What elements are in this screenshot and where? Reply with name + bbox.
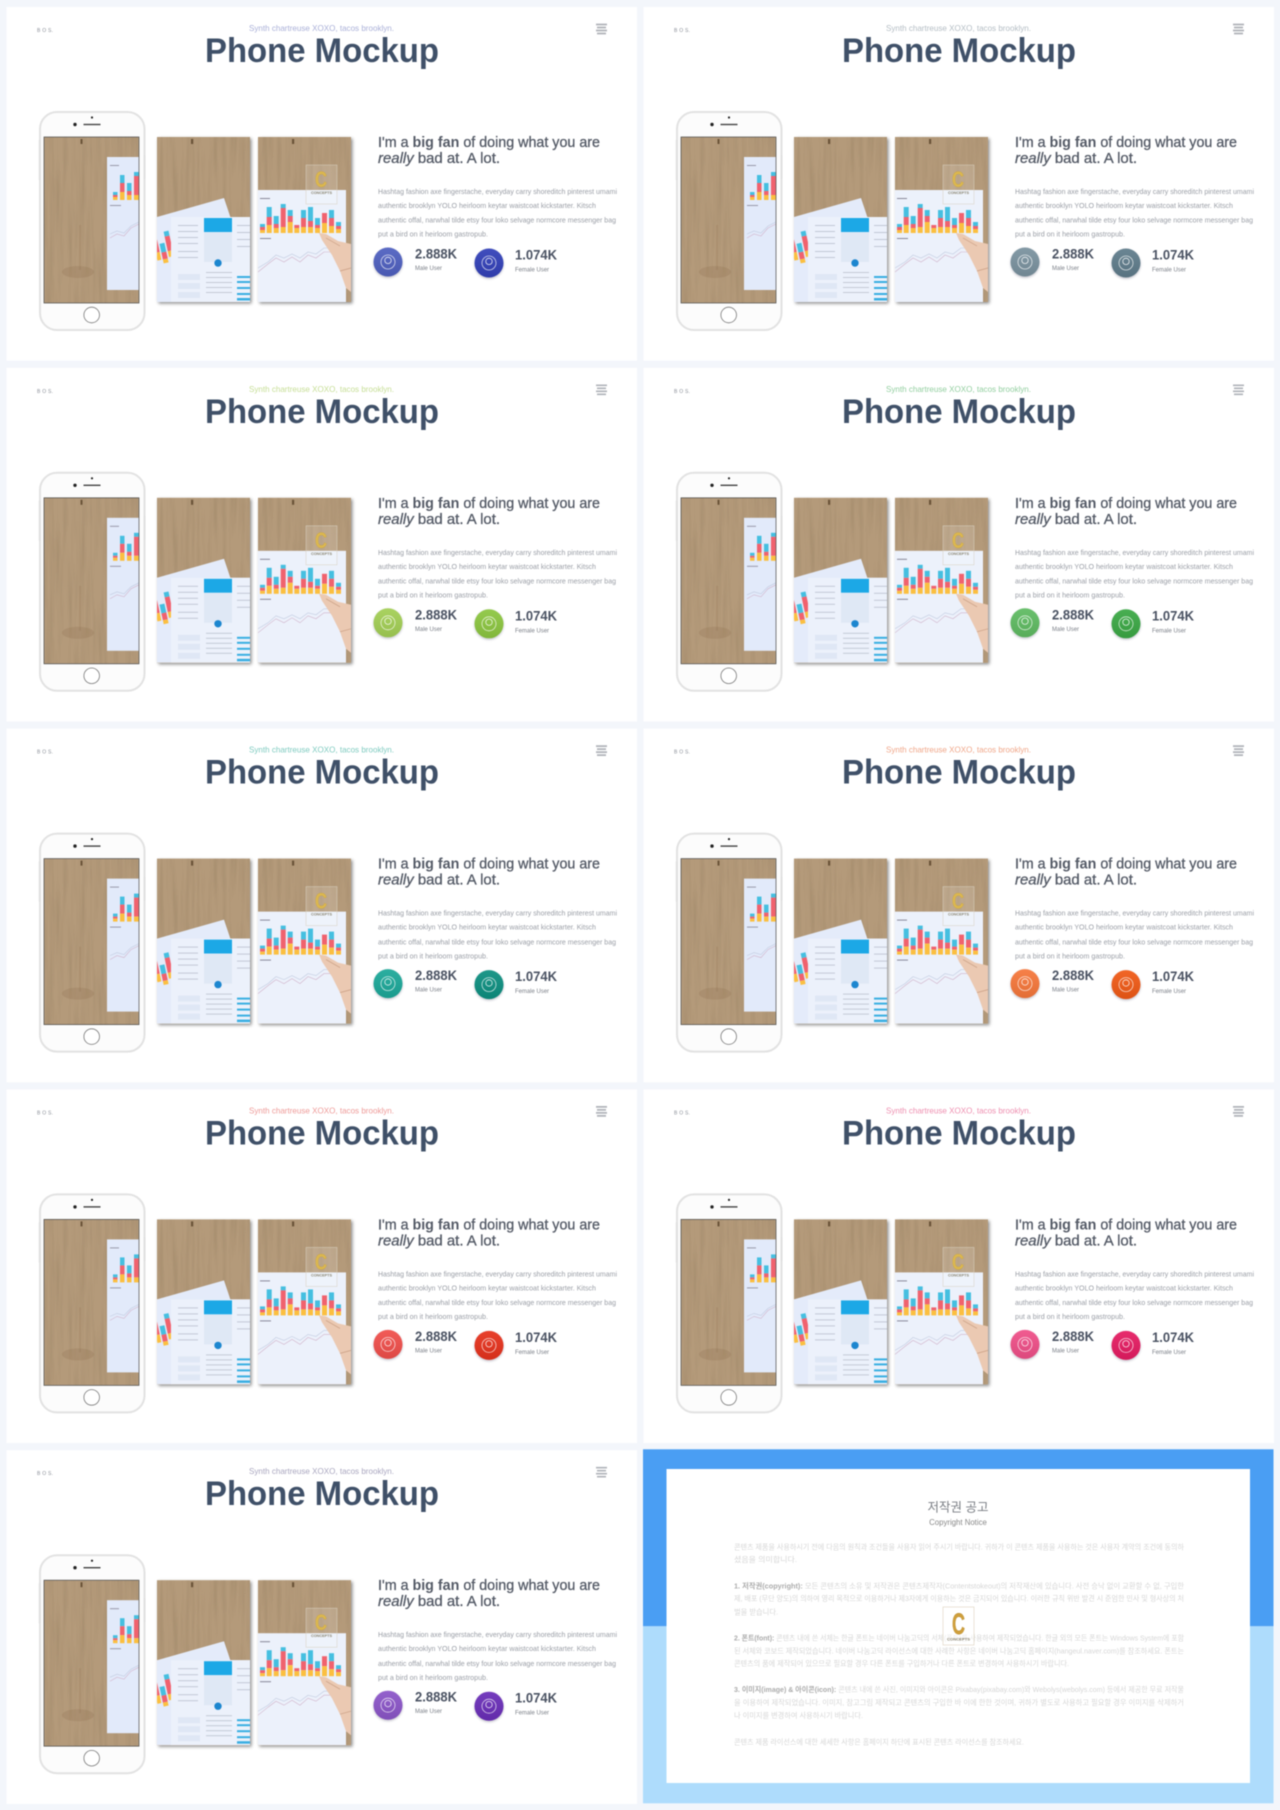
paragraph: authentic offal, narwhal tilde etsy four loko selvage normcore messenger bag [378,216,616,225]
panel: slide 8 pink [644,1089,1274,1443]
stat: female user: 1.074K [515,248,557,262]
paragraph [1015,548,1254,600]
photo card: chart and hand [258,137,351,302]
paragraph: Hashtag fashion axe fingerstache, everyday carry shoreditch pinterest umami [378,1630,617,1639]
paragraph: authentic offal, narwhal tilde etsy four loko selvage normcore messenger bag [1015,216,1253,225]
headline: I'm a big fan of doing what you are [1015,1217,1237,1233]
brand mark: B O S. [674,1110,690,1116]
logo on photo: C [952,528,964,553]
stat: female user: 1.074K [1152,248,1194,262]
logo: concepts: CONCEPTS [947,1638,971,1642]
panel: slide 3 lime [6,368,637,722]
icon: male user [1010,1330,1040,1359]
stat: female user: Female User [1152,989,1186,995]
stat: male user: Male User [415,1709,442,1715]
paragraph: put a bird on it heirloom gastropub. [1015,951,1125,960]
icon: menu [596,1107,607,1116]
photo card: documents [789,137,887,302]
subtitle: Synth chartreuse XOXO, tacos brooklyn. [886,745,1031,755]
stat: male user [415,1690,457,1715]
stat: male user: 2.888K [1052,968,1094,983]
paragraph: put a bird on it heirloom gastropub. [1015,230,1125,239]
section 3 image and icon: 을 이용하여 제작되었습니다. 이미지, 참고그림 제작되고 콘텐츠의 구입한 바 이에 한한 것이며, 귀하가 별도로 사용하고 필요할 경우 이미지를 삭제하거 [734,1698,1184,1707]
paragraph [378,1630,617,1682]
paragraph [1015,909,1254,960]
photo card: chart and hand [895,498,988,663]
photo card: documents [152,859,250,1024]
title: Phone Mockup [842,393,1076,431]
paragraph: Hashtag fashion axe fingerstache, everyday carry shoreditch pinterest umami [378,187,617,196]
stat: male user: Male User [1052,627,1079,633]
phone mockup [676,1194,782,1412]
stat: male user [1052,1329,1094,1354]
stat: male user: Male User [415,1348,442,1354]
icon: male user [1010,248,1040,276]
intro text: 셨음을 의미합니다. [734,1555,797,1564]
stat: male user: Male User [415,627,442,633]
stat: male user: Male User [1052,1348,1079,1354]
photo card: documents [152,498,250,663]
section 1 copyright: 1. 저작권(copyright): 모든 콘텐츠의 소유 및 저작권은 콘텐츠제작자(Contentstokeout)의 저작재산에 있습니다. 사전 승낙 없이 교환할 수 없, 구입한 [734,1582,1184,1590]
headline: I'm a big fan of doing what you are [1015,857,1237,873]
section 3 image and icon [734,1685,1184,1720]
brand mark: B O S. [37,28,53,34]
stat: female user: 1.074K [515,1691,557,1706]
copyright heading: Copyright Notice [929,1518,987,1527]
icon: menu [596,1468,607,1477]
headline [378,496,600,528]
phone mockup [39,1555,145,1773]
panel: slide 6 orange [644,729,1274,1082]
subtitle: Synth chartreuse XOXO, tacos brooklyn. [886,23,1031,33]
section 1 copyright: 제, 배포 (무단 양도)의 의하여 영리 목적으로 이용하거나 제3자에게 이용하는 것은 금지되어 있습니다. 이러한 규칙 위반 발견 시 준엄한 민사 및 형사상의 처 [734,1594,1184,1603]
phone mockup [39,1194,145,1412]
headline [378,1217,600,1249]
headline: I'm a big fan of doing what you are [378,496,600,512]
logo on photo [311,528,333,556]
photo card: documents [789,1219,887,1384]
stat: male user [415,246,457,272]
stat: female user: 1.074K [515,1330,557,1345]
icon: menu [1233,746,1244,755]
panel: slide 5 teal [6,729,637,1082]
paragraph: authentic brooklyn YOLO heirloom keytar waistcoat kickstarter. Kitsch [1015,923,1233,932]
logo: concepts [943,1607,974,1645]
paragraph: authentic brooklyn YOLO heirloom keytar waistcoat kickstarter. Kitsch [1015,1283,1233,1292]
stat: male user: 2.888K [415,968,457,983]
stat: male user [1052,968,1094,994]
headline: really bad at. A lot. [1015,151,1137,167]
panel: slide 1 indigo [6,7,637,361]
logo on photo: C [952,889,964,914]
phone mockup [676,834,782,1052]
panel: slide 2 slate [644,7,1274,361]
paragraph: Hashtag fashion axe fingerstache, everyday carry shoreditch pinterest umami [1015,548,1254,557]
phone mockup [676,112,782,330]
stat: male user [1052,607,1094,633]
headline: I'm a big fan of doing what you are [378,1578,600,1594]
logo on photo: CONCEPTS [311,1634,333,1638]
stat: male user: 2.888K [1052,246,1094,262]
paragraph: authentic offal, narwhal tilde etsy four loko selvage normcore messenger bag [378,1298,616,1307]
photo card: documents [789,859,887,1024]
stat: female user: Female User [515,1350,549,1356]
subtitle: Synth chartreuse XOXO, tacos brooklyn. [886,384,1031,394]
stat: female user: 1.074K [1152,1330,1194,1345]
headline: I'm a big fan of doing what you are [378,135,600,151]
title: Phone Mockup [842,1114,1076,1152]
icon: female user [1112,970,1140,999]
paragraph: authentic offal, narwhal tilde etsy four loko selvage normcore messenger bag [378,1659,616,1668]
stat: female user [1152,1330,1194,1356]
stat: female user: Female User [515,1711,549,1717]
paragraph: authentic offal, narwhal tilde etsy four loko selvage normcore messenger bag [1015,576,1253,585]
paragraph: Hashtag fashion axe fingerstache, everyday carry shoreditch pinterest umami [378,548,617,557]
photo card: documents [152,137,250,302]
stat: female user [515,1330,557,1356]
section 2 font: 2. 폰트(font): 콘텐츠 내에 쓴 서체는 한글 폰트는 네이버 나눔고딕의 서체(폰트)를 사용하여 제작되었습니다. 한글 외의 모든 폰트는 Windows System에 포함 [734,1634,1184,1642]
title: Phone Mockup [842,754,1076,792]
paragraph: put a bird on it heirloom gastropub. [1015,1312,1125,1321]
logo on photo: CONCEPTS [311,191,333,195]
paragraph: authentic brooklyn YOLO heirloom keytar waistcoat kickstarter. Kitsch [1015,562,1233,571]
paragraph: authentic offal, narwhal tilde etsy four loko selvage normcore messenger bag [1015,1298,1253,1307]
photo card: chart and hand [258,1219,351,1384]
copyright heading [928,1500,988,1527]
stat: male user: Male User [415,988,442,994]
phone mockup [39,112,145,330]
stat: male user: 2.888K [415,246,457,262]
headline [378,135,600,167]
logo on photo: C [315,528,327,553]
stat: male user: 2.888K [415,1690,457,1705]
icon: female user [1112,1331,1140,1360]
icon: menu [596,385,607,394]
photo card: chart and hand [895,859,988,1024]
logo on photo: CONCEPTS [311,1273,333,1277]
panel: copyright notice [643,1449,1274,1803]
headline [378,857,600,889]
logo on photo: C [315,167,327,192]
logo: concepts: C [952,1608,965,1641]
brand mark: B O S. [674,389,690,395]
photo card: documents [152,1580,250,1745]
paragraph [1015,1269,1254,1321]
paragraph: authentic offal, narwhal tilde etsy four loko selvage normcore messenger bag [1015,937,1253,946]
paragraph: Hashtag fashion axe fingerstache, everyday carry shoreditch pinterest umami [378,1269,617,1278]
title: Phone Mockup [205,32,439,70]
phone mockup [39,473,145,691]
paragraph [378,548,617,600]
paragraph: Hashtag fashion axe fingerstache, everyday carry shoreditch pinterest umami [1015,187,1254,196]
headline [1015,135,1237,167]
logo on photo: CONCEPTS [311,913,333,917]
stat: female user: Female User [515,628,549,634]
icon: male user [1010,608,1040,637]
stat: female user [1152,608,1194,634]
icon: male user [374,248,402,276]
logo on photo: C [952,167,964,192]
panel: slide 7 red [6,1089,637,1443]
stat: female user [515,248,557,274]
photo card: documents [152,1219,250,1384]
icon: female user [474,609,504,638]
section 2 font: 콘텐츠의 품에 제작되어 있으므로 필요할 경우 다른 폰트를 구입하거나 다른 폰트로 변경하여 사용하시기 바랍니다. [734,1659,1069,1668]
headline: really bad at. A lot. [1015,1233,1137,1249]
paragraph [378,909,617,960]
logo on photo [948,528,970,556]
headline [1015,496,1237,528]
photo card: chart and hand [258,1580,351,1745]
stat: female user: Female User [515,989,549,995]
logo on photo [948,167,970,195]
icon: female user [1112,609,1140,638]
copyright heading: 저작권 공고 [928,1500,988,1514]
brand mark: B O S. [37,1471,53,1477]
paragraph: put a bird on it heirloom gastropub. [378,1312,488,1321]
stat: male user: 2.888K [415,1329,457,1344]
title: Phone Mockup [842,32,1076,70]
icon: menu [1233,1107,1244,1116]
photo card: documents [789,498,887,663]
paragraph: authentic brooklyn YOLO heirloom keytar waistcoat kickstarter. Kitsch [378,562,596,571]
stat: male user [1052,246,1094,272]
stat: female user: Female User [1152,628,1186,634]
paragraph: put a bird on it heirloom gastropub. [378,1673,488,1682]
section 2 font [734,1634,1184,1668]
logo on photo: CONCEPTS [948,1273,970,1277]
logo on photo: C [315,1610,327,1635]
stat: male user: 2.888K [1052,1329,1094,1344]
brand mark: B O S. [37,750,53,756]
phone mockup [39,834,145,1052]
paragraph: Hashtag fashion axe fingerstache, everyday carry shoreditch pinterest umami [378,909,617,918]
title: Phone Mockup [205,1114,439,1152]
stat: female user: 1.074K [1152,969,1194,984]
paragraph: Hashtag fashion axe fingerstache, everyday carry shoreditch pinterest umami [1015,909,1254,918]
subtitle: Synth chartreuse XOXO, tacos brooklyn. [249,384,394,394]
paragraph [1015,187,1254,239]
paragraph: put a bird on it heirloom gastropub. [378,951,488,960]
paragraph: Hashtag fashion axe fingerstache, everyday carry shoreditch pinterest umami [1015,1269,1254,1278]
paragraph: authentic brooklyn YOLO heirloom keytar waistcoat kickstarter. Kitsch [378,1283,596,1292]
paragraph: put a bird on it heirloom gastropub. [1015,590,1125,599]
section 1 copyright: 벌을 받습니다. [734,1608,778,1616]
photo card: chart and hand [258,859,351,1024]
subtitle: Synth chartreuse XOXO, tacos brooklyn. [249,1466,394,1476]
subtitle: Synth chartreuse XOXO, tacos brooklyn. [249,745,394,755]
title: Phone Mockup [205,754,439,792]
paragraph: authentic brooklyn YOLO heirloom keytar waistcoat kickstarter. Kitsch [378,201,596,210]
logo on photo [311,1249,333,1277]
stat: male user: 2.888K [1052,607,1094,622]
headline: really bad at. A lot. [378,512,500,528]
logo on photo [948,889,970,917]
phone mockup [676,473,782,691]
stat: female user [1152,969,1194,995]
headline [1015,1217,1237,1249]
paragraph: authentic brooklyn YOLO heirloom keytar waistcoat kickstarter. Kitsch [378,923,596,932]
paragraph: put a bird on it heirloom gastropub. [378,590,488,599]
stat: male user [415,1329,457,1354]
panel: slide 4 green [644,368,1274,722]
stat: female user [515,1691,557,1717]
logo on photo [311,1610,333,1638]
paragraph: authentic offal, narwhal tilde etsy four loko selvage normcore messenger bag [378,937,616,946]
stat: male user: Male User [1052,266,1079,272]
icon: female user [474,248,504,278]
title: Phone Mockup [205,1475,439,1513]
stat: female user [515,608,557,634]
logo on photo: CONCEPTS [948,913,970,917]
logo on photo [311,889,333,917]
stat: female user: 1.074K [1152,608,1194,623]
photo card: chart and hand [895,137,988,302]
section 1 copyright [734,1582,1184,1616]
icon: female user [474,970,504,999]
headline: I'm a big fan of doing what you are [378,857,600,873]
stat: male user: Male User [1052,988,1079,994]
intro text [734,1542,1184,1564]
stat: male user [415,607,457,633]
icon: menu [596,24,607,34]
stat: female user: 1.074K [515,608,557,623]
headline: really bad at. A lot. [378,1233,500,1249]
subtitle: Synth chartreuse XOXO, tacos brooklyn. [886,1105,1031,1115]
icon: male user [374,1691,402,1720]
intro text: 콘텐츠 제품을 사용하시기 전에 다음의 원칙과 조건들을 사용자 읽어 주시기 바랍니다. 귀하가 이 콘텐츠 제품을 사용하는 것은 사용자 계약의 조건에 동의하 [734,1542,1184,1552]
headline [1015,857,1237,889]
stat: female user: Female User [1152,268,1186,274]
photo card: chart and hand [258,498,351,663]
headline [378,1578,600,1610]
headline: really bad at. A lot. [378,873,500,889]
logo on photo [948,1249,970,1277]
stat: female user: Female User [1152,1350,1186,1356]
section 3 image and icon: 나 이미지를 변경하여 사용하시기 바랍니다. [734,1711,863,1720]
icon: male user [1010,969,1040,998]
license note: 콘텐츠 제품 라이선스에 대한 세세한 사항은 홈페이지 하단에 표시된 콘텐츠 라이선스를 참조하세요. [734,1738,1024,1746]
headline: I'm a big fan of doing what you are [1015,496,1237,512]
icon: menu [596,746,607,755]
brand mark: B O S. [37,1110,53,1116]
logo on photo: CONCEPTS [311,552,333,556]
logo on photo [311,167,333,195]
paragraph [378,1269,617,1321]
headline: really bad at. A lot. [1015,873,1137,889]
icon: female user [474,1331,504,1360]
section 3 image and icon: 3. 이미지(image) & 아이콘(icon): 콘텐츠 내에 쓴 사진, 이미지와 아이콘은 Pixabay(pixabay.com)와 Webolys(webolys.com) 등에서 제공한 무료 저작물 [734,1685,1184,1694]
stat: female user [1152,248,1194,274]
icon: menu [1233,385,1244,394]
title: Phone Mockup [205,393,439,431]
section 2 font: 된 서체와 코보드 제작되었습니다. 네이버 나눔고딕 라이선스에 대한 사례한 사항은 네이버 나눔고딕 홈페이지(hangeul.naver.com)를 참조하세요. 폰트는 [734,1646,1184,1656]
brand mark: B O S. [674,750,690,756]
logo on photo: CONCEPTS [948,191,970,195]
paragraph: put a bird on it heirloom gastropub. [378,230,488,239]
logo on photo: C [315,889,327,914]
icon: female user [474,1692,504,1721]
icon: male user [374,1330,402,1359]
headline: really bad at. A lot. [378,1594,500,1610]
brand mark: B O S. [674,28,690,34]
paragraph: authentic offal, narwhal tilde etsy four loko selvage normcore messenger bag [378,576,616,585]
paragraph [378,187,617,239]
icon: male user [374,969,402,998]
subtitle: Synth chartreuse XOXO, tacos brooklyn. [249,1105,394,1115]
subtitle: Synth chartreuse XOXO, tacos brooklyn. [249,23,394,33]
icon: menu [1233,24,1244,34]
logo on photo: CONCEPTS [948,552,970,556]
stat: female user: Female User [515,268,549,274]
stat: male user [415,968,457,994]
headline: I'm a big fan of doing what you are [378,1217,600,1233]
panel: slide 9 purple [6,1450,637,1804]
photo card: chart and hand [895,1219,988,1384]
icon: female user [1112,248,1140,278]
logo on photo: C [315,1249,327,1274]
paragraph: authentic brooklyn YOLO heirloom keytar waistcoat kickstarter. Kitsch [1015,201,1233,210]
headline: I'm a big fan of doing what you are [1015,135,1237,151]
headline: really bad at. A lot. [378,151,500,167]
stat: female user [515,969,557,995]
stat: male user: Male User [415,266,442,272]
logo on photo: C [952,1249,964,1274]
stat: male user: 2.888K [415,607,457,622]
headline: really bad at. A lot. [1015,512,1137,528]
paragraph: authentic brooklyn YOLO heirloom keytar waistcoat kickstarter. Kitsch [378,1644,596,1653]
stat: female user: 1.074K [515,969,557,984]
icon: male user [374,608,402,637]
brand mark: B O S. [37,389,53,395]
